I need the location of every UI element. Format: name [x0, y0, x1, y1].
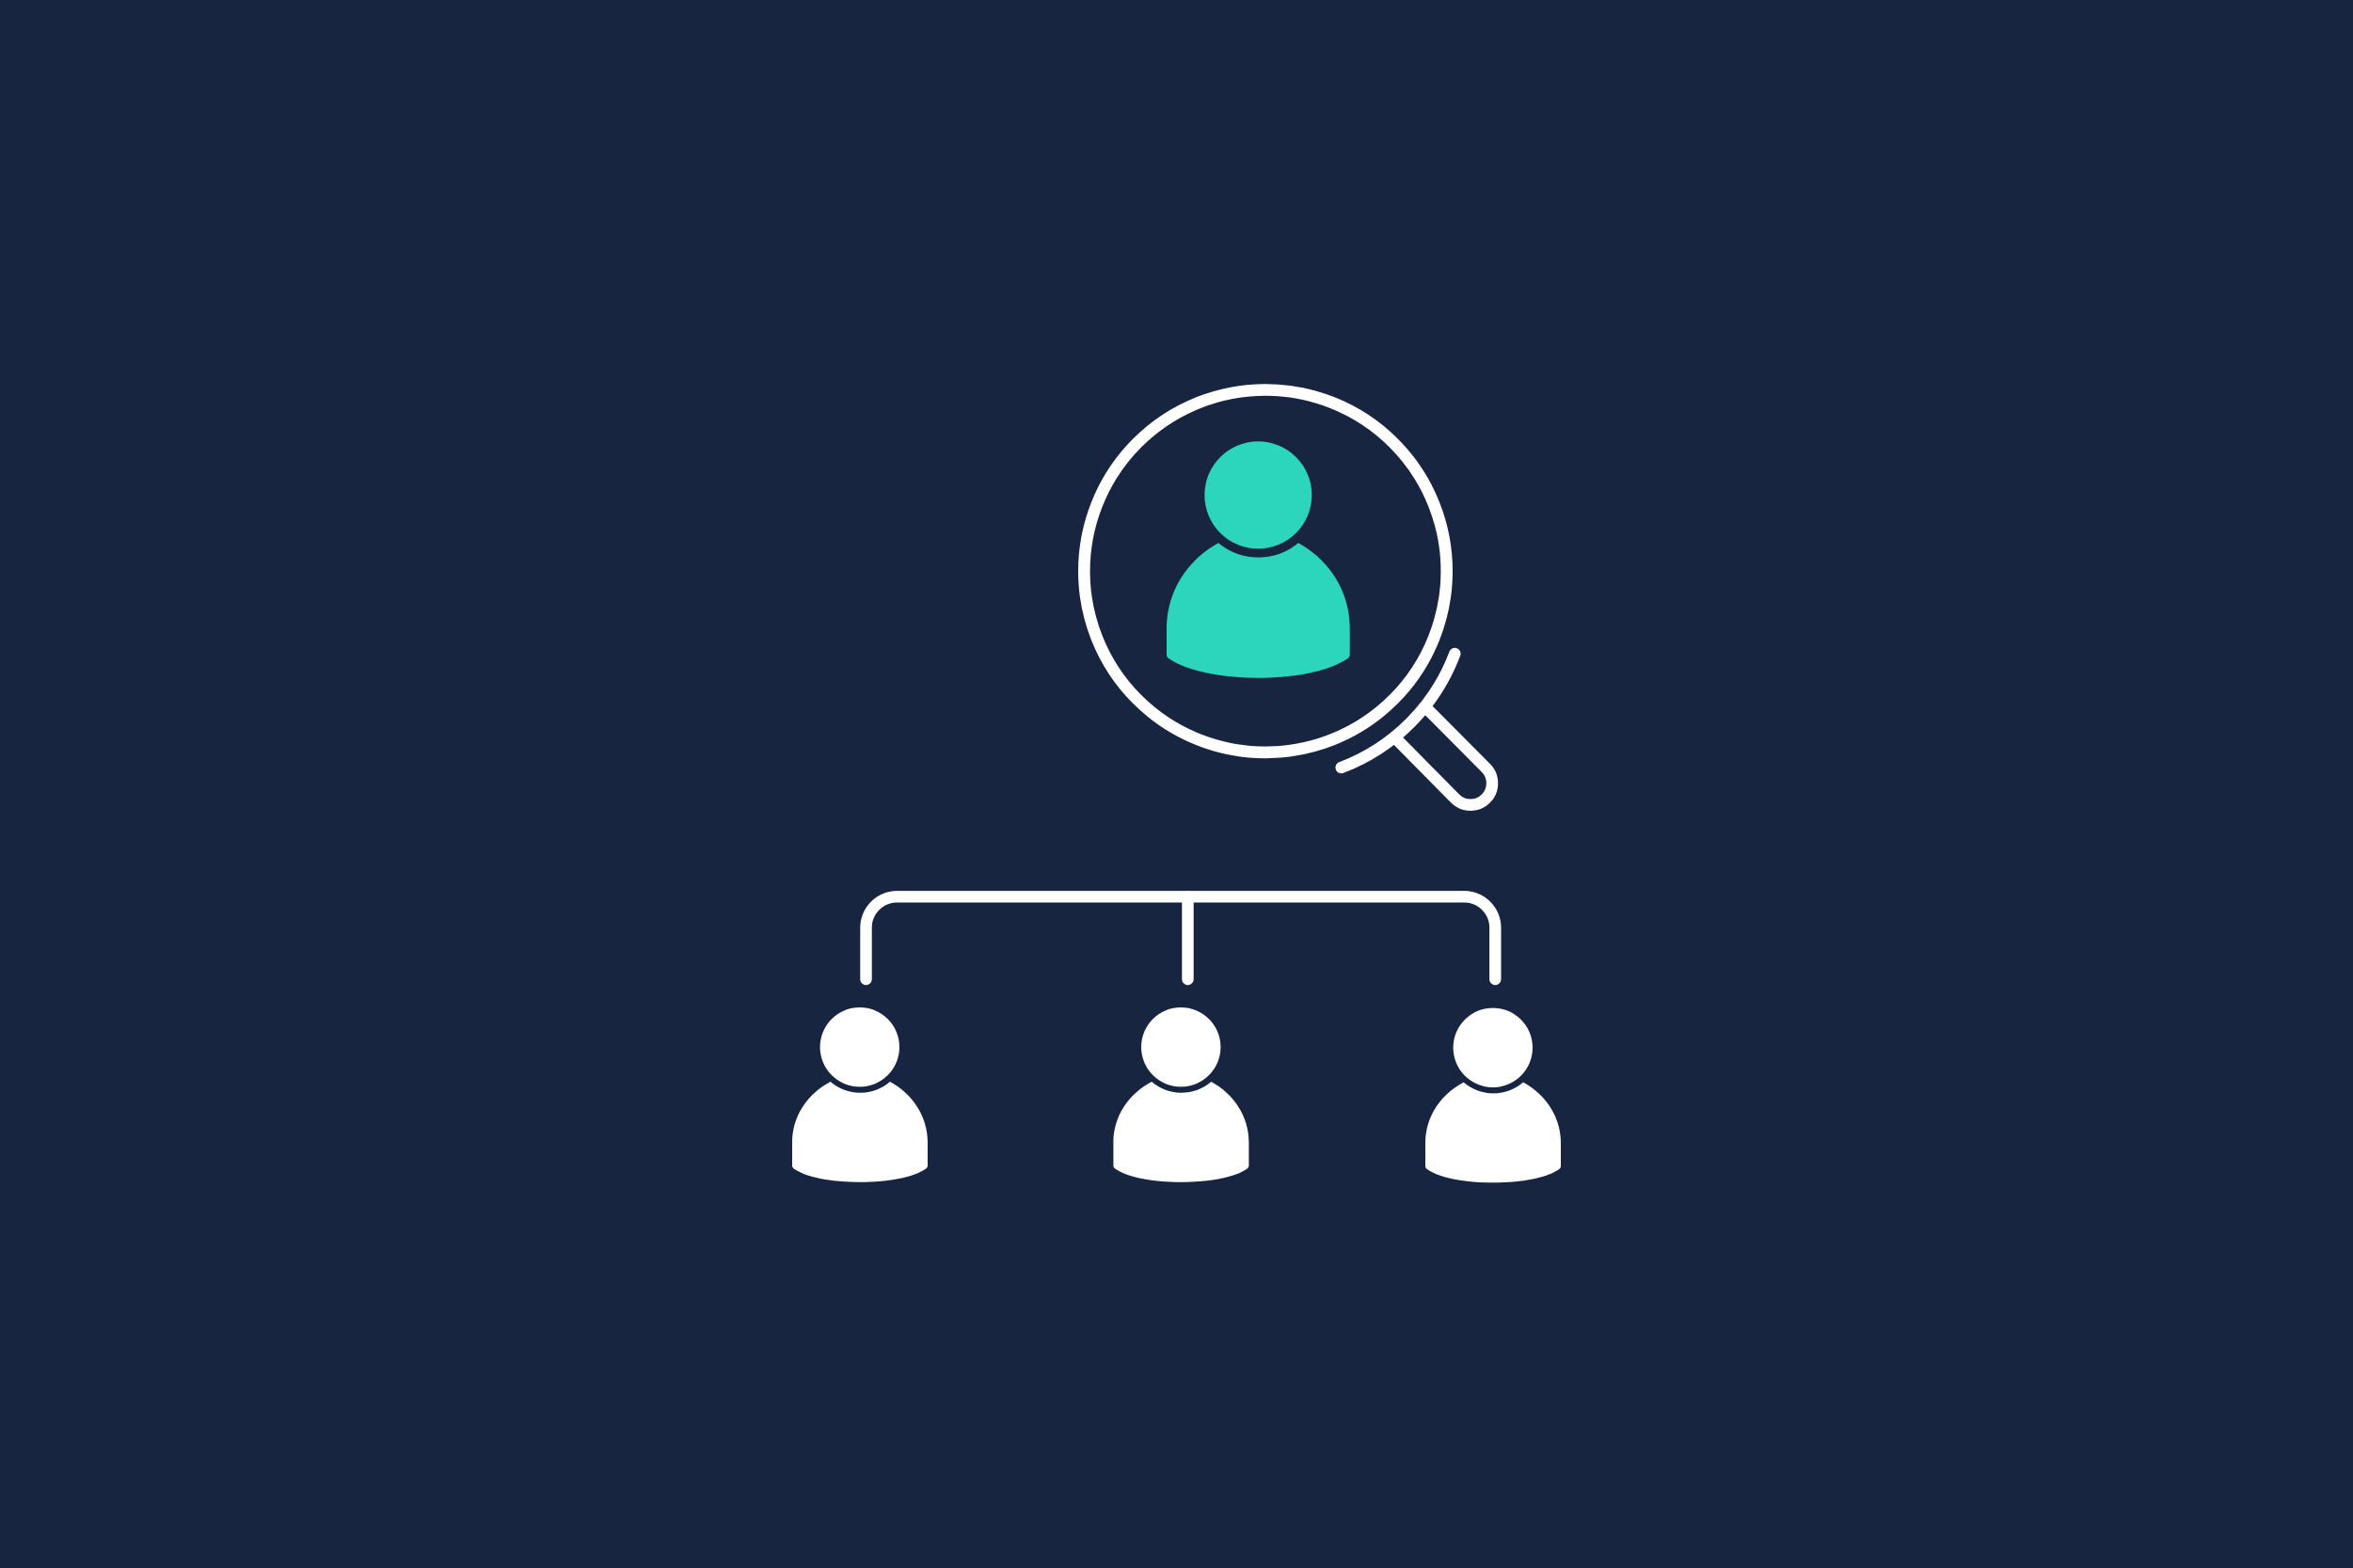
icon: magnifying glass: [1084, 389, 1492, 805]
icon: left person: [792, 1007, 928, 1182]
icon: middle person: [1113, 1007, 1248, 1182]
icon: highlighted person: [1167, 441, 1350, 678]
connector: hierarchy bracket: [866, 896, 1495, 979]
icon: right person: [1425, 1008, 1561, 1182]
